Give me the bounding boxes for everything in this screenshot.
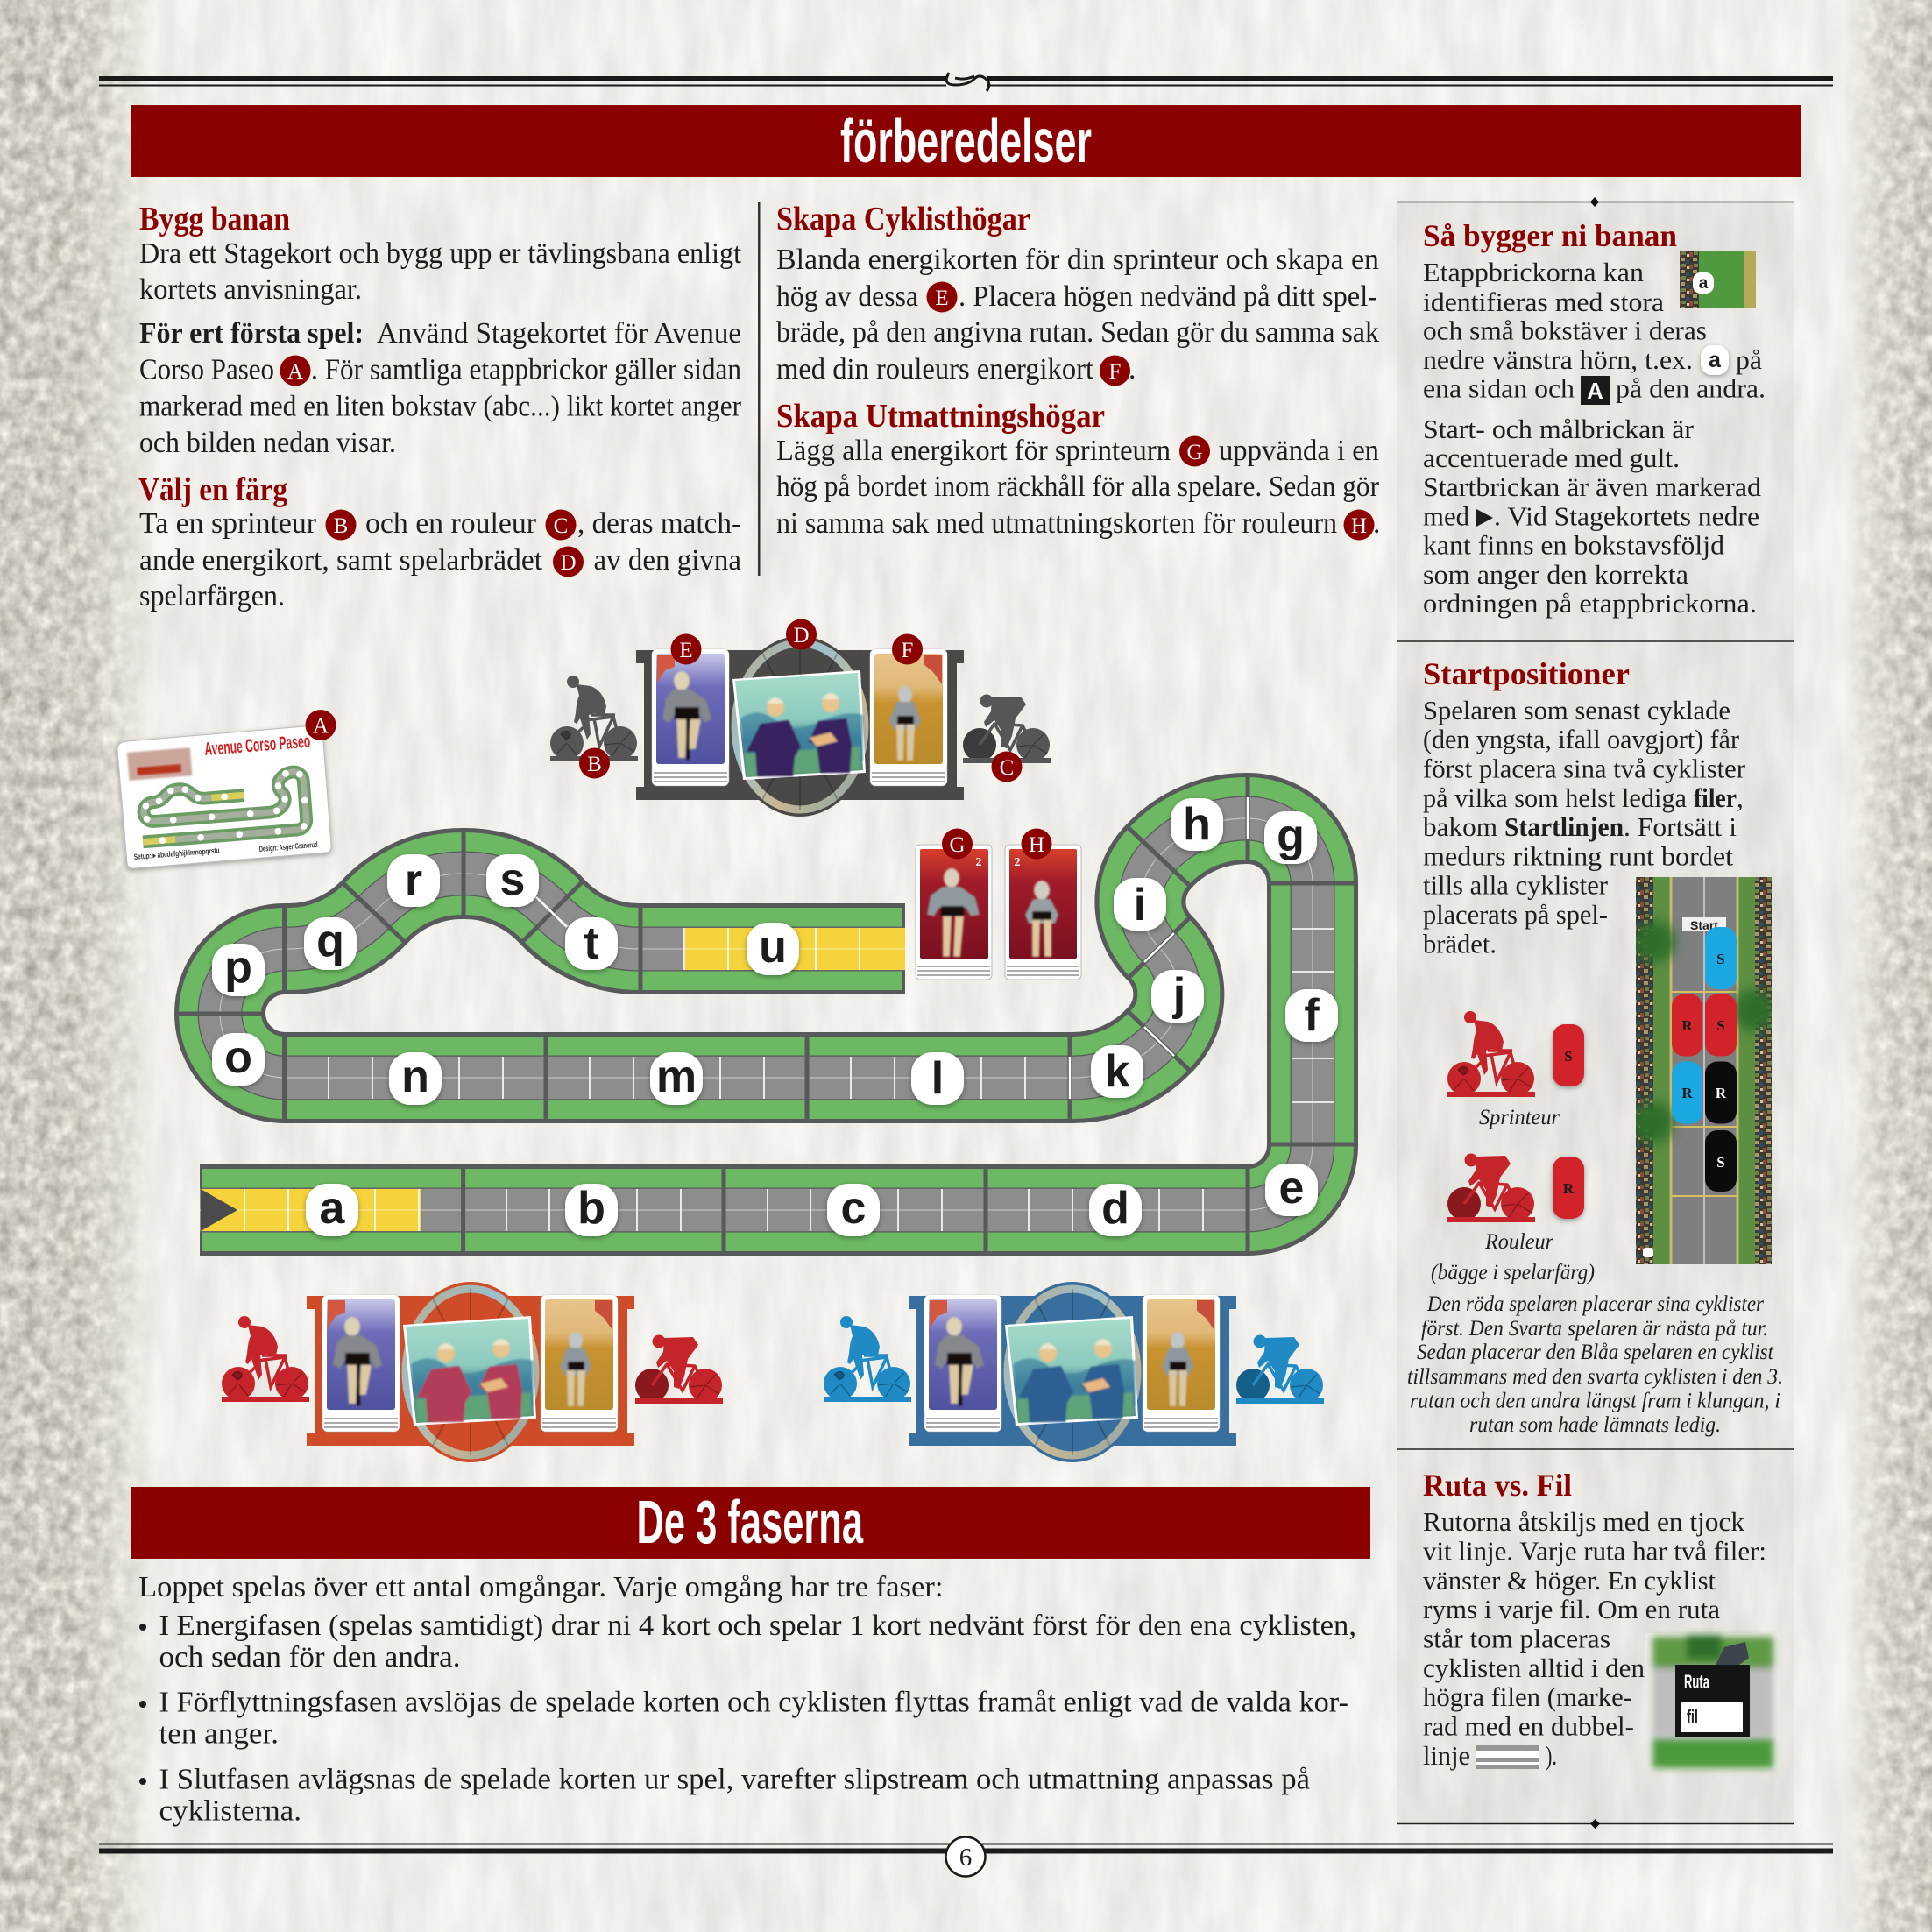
panel: middle column text — [776, 201, 1380, 540]
text block: Skapa Utmattningshögar — [776, 435, 1380, 540]
lane lines — [200, 818, 1334, 1231]
tile r: r — [405, 855, 422, 906]
caption: placement example: Sedan placerar den Blåa spelaren en cyklist — [1417, 1339, 1774, 1364]
badge: H inline — [1344, 510, 1374, 540]
text block: Välj en färg: , deras match- — [577, 507, 741, 540]
tile l: l — [931, 1053, 944, 1104]
text block: Välj en färg: av den givna — [594, 544, 741, 577]
tile d: d — [1101, 1183, 1129, 1234]
text block: Skapa Utmattningshögar: . — [1373, 507, 1380, 540]
badge F — [892, 634, 923, 664]
text block: tile letters — [1423, 257, 1766, 403]
badge: H inline: H — [1351, 514, 1367, 538]
top double rule with ornament — [99, 73, 1833, 91]
text block: tile letters: på — [1736, 344, 1762, 375]
tile i: i — [1134, 880, 1146, 931]
text block: Ruta vs. Fil: ryms i varje fil. Om en ruta — [1423, 1594, 1720, 1624]
text block: Startpositioner: (den yngsta, ifall oavgjort) får — [1423, 724, 1740, 754]
caption: placement example — [1407, 1291, 1783, 1437]
tile u: u — [759, 922, 787, 973]
badge D — [786, 619, 817, 650]
column divider — [758, 202, 761, 576]
text block: Bygg banan: markerad med en liten bokstav (abc...) likt kortet anger — [139, 391, 741, 422]
badge G — [942, 829, 973, 859]
tile g — [1264, 810, 1317, 864]
badge: C inline — [545, 510, 577, 540]
tile a — [306, 1183, 358, 1236]
tile f — [1285, 989, 1338, 1042]
icon: tile corner image: a — [1699, 274, 1709, 293]
text block: Bygg banan: Använd Stagekortet för Avenue — [377, 317, 741, 350]
icon: grey sprinteur B — [550, 676, 638, 761]
text block: Ruta vs. Fil: står tom placeras — [1423, 1623, 1610, 1654]
icon: white letter tile a: a — [1709, 348, 1722, 372]
text block: Skapa Utmattningshögar: Lägg alla energikort för sprinteurn — [776, 435, 1171, 467]
text block: Startpositioner: . Fortsätt i — [1624, 811, 1737, 842]
badge C: C — [1000, 756, 1014, 780]
white road joints — [536, 797, 1248, 1099]
banner: De 3 faserna: De 3 faserna — [636, 1488, 864, 1556]
text block: De 3 faserna: Loppet spelas över ett antal omgångar. Varje omgång har tre faser: — [138, 1571, 943, 1603]
image: ruta and fil example: Ruta — [1684, 1671, 1709, 1693]
badge B: B — [587, 753, 602, 776]
text block: Startpositioner: Spelaren som senast cyklade — [1423, 695, 1730, 725]
text block: tile letters: identifieras med stora — [1423, 287, 1664, 317]
text block: Startpositioner: på vilka som helst lediga — [1423, 782, 1687, 813]
tile q — [304, 916, 357, 970]
icon: tile corner image — [1680, 251, 1756, 308]
card design credit: Design: Asger Granerud — [258, 840, 318, 853]
text block: Ruta vs. Fil — [1423, 1506, 1766, 1771]
tile k: k — [1105, 1046, 1130, 1097]
illustration: exhaustion card stack H — [1005, 829, 1081, 980]
illustration: exhaustion card stack G: 2 — [976, 856, 981, 869]
badge: E inline — [927, 282, 957, 312]
tile borders — [176, 775, 1356, 1255]
tile r — [387, 854, 440, 907]
text block: tile letters: nedre vänstra hörn, t.ex. — [1423, 344, 1693, 375]
tile n: n — [401, 1051, 429, 1102]
label: Sprinteur: Sprinteur — [1479, 1104, 1560, 1129]
text block: start and finish tiles: accentuerade med gult. — [1423, 442, 1680, 473]
text block: Skapa Cyklisthögar: . — [1129, 353, 1136, 386]
card setup line: Setup: ▸ abcdefghijklmnopqrstu — [133, 846, 220, 861]
player board with cards — [636, 636, 964, 817]
tile c: c — [841, 1183, 866, 1234]
badge: A inline — [280, 356, 310, 386]
illustration: exhaustion card stack G — [916, 829, 992, 980]
illustration: blue player set — [824, 1282, 1324, 1462]
text block: start and finish tiles: . Vid Stagekortets nedre — [1494, 501, 1759, 531]
illustration: red player set — [222, 1282, 723, 1462]
token: red S: S — [1564, 1048, 1573, 1065]
badge H: H — [1029, 833, 1044, 857]
tile p — [212, 942, 265, 996]
text block: Skapa Cyklisthögar: hög av dessa — [776, 280, 918, 313]
banner: förberedelser: förberedelser — [840, 107, 1092, 175]
badge E — [671, 634, 701, 664]
icon: grey rouleur C — [963, 694, 1051, 763]
text block: tile letters: och små bokstäver i deras — [1423, 315, 1707, 345]
tile e: e — [1279, 1163, 1304, 1214]
text block: Bygg banan: Dra ett Stagekort och bygg upp er tävlingsbana enligt — [139, 237, 742, 270]
badge: D inline: D — [560, 551, 577, 575]
icon: black letter tile A: A — [1587, 378, 1603, 404]
text block: Startpositioner: medurs riktning runt bordet — [1423, 841, 1733, 871]
badge: E inline: E — [935, 287, 949, 310]
text block: Startpositioner: bakom — [1423, 811, 1497, 842]
badge: F inline: F — [1109, 360, 1121, 384]
red player board — [307, 1282, 634, 1462]
text block: start and finish tiles: med — [1423, 501, 1469, 531]
text block: De 3 faserna: cyklisterna. — [159, 1794, 301, 1828]
badge: G inline — [1179, 436, 1210, 466]
text block: tile letters: Etappbrickorna kan — [1423, 257, 1645, 287]
image: start road with tokens: Start — [1690, 918, 1718, 932]
banner: De 3 faserna — [131, 1487, 1370, 1559]
start triangle — [201, 1189, 237, 1231]
badge: A inline: A — [287, 360, 303, 384]
icon: double line — [1476, 1745, 1539, 1769]
tile j: j — [1172, 969, 1185, 1020]
tile n — [389, 1051, 442, 1105]
tile l — [911, 1052, 964, 1105]
tile b: b — [577, 1183, 605, 1234]
text block: Välj en färg: ande energikort, samt spelarbrädet — [139, 544, 543, 577]
tile q: q — [316, 916, 344, 966]
panel: left column text — [138, 201, 742, 612]
text block: Ruta vs. Fil: vit linje. Varje ruta har två filer: — [1423, 1535, 1766, 1567]
text block: start and finish tiles — [1423, 414, 1762, 619]
heading: Ruta vs. Fil: Ruta vs. Fil — [1423, 1468, 1572, 1503]
heading: Skapa Cyklisthögar: Skapa Cyklisthögar — [776, 201, 1030, 237]
tile p: p — [224, 942, 252, 993]
icon: red sprinteur — [1447, 1011, 1535, 1097]
text block: De 3 faserna: I Förflyttningsfasen avslöjas de spelade korten och cyklisten flyttas framåt enligt vad de valda kor- — [159, 1686, 1348, 1719]
text block: tile letters: ena sidan och — [1423, 373, 1575, 403]
icon: blue sprinteur — [824, 1316, 911, 1402]
page number — [946, 1836, 985, 1877]
tile e — [1265, 1163, 1318, 1216]
text block: De 3 faserna — [138, 1571, 1356, 1828]
tile s — [486, 854, 539, 907]
text block: Skapa Cyklisthögar: . Placera högen nedvänd på ditt spel- — [959, 280, 1377, 313]
text block: Bygg banan: För ert första spel: — [139, 317, 364, 350]
panel: Så bygger ni banan — [1397, 197, 1794, 619]
text block: Välj en färg — [139, 507, 741, 612]
banner: förberedelser — [131, 105, 1801, 177]
text block: Skapa Utmattningshögar: hög på bordet inom räckhåll för alla spelare. Sedan gör — [776, 471, 1379, 503]
text block: Skapa Utmattningshögar: uppvända i en — [1219, 435, 1379, 467]
logo — [127, 747, 192, 781]
card title: Avenue Corso Paseo — [204, 732, 311, 760]
text block: De 3 faserna: och sedan för den andra. — [159, 1641, 461, 1674]
image: start road with tokens: R — [1681, 1017, 1693, 1034]
text block: Skapa Cyklisthögar: Blanda energikorten för din sprinteur och skapa en — [776, 244, 1379, 276]
text block: Ruta vs. Fil: cyklisten alltid i den — [1423, 1652, 1645, 1683]
text block: start and finish tiles: Startbrickan är även markerad — [1423, 471, 1762, 502]
tile j — [1151, 969, 1204, 1023]
badge H — [1022, 829, 1051, 859]
tile m: m — [656, 1051, 697, 1102]
mini track — [138, 768, 311, 846]
image: start road with tokens: S — [1716, 1154, 1725, 1171]
image: start road with tokens: R — [1716, 1085, 1727, 1101]
text block: Ruta vs. Fil: Rutorna åtskiljs med en tjock — [1423, 1506, 1745, 1537]
text block: De 3 faserna: ten anger. — [159, 1717, 279, 1751]
text block: tile letters: på den andra. — [1616, 373, 1766, 403]
text block: Ruta vs. Fil: högra filen (marke- — [1423, 1681, 1632, 1712]
caption: placement example: rutan och den andra längst fram i klungan, i — [1410, 1388, 1780, 1412]
image: ruta and fil example — [1645, 1633, 1780, 1769]
badge F: F — [902, 639, 913, 662]
text block: Välj en färg: och en rouleur — [365, 507, 536, 540]
text block: De 3 faserna: I Energifasen (spelas samtidigt) drar ni 4 kort och spelar 1 kort nedvänt först för den ena cyklisten, — [159, 1610, 1356, 1642]
tile o — [212, 1032, 265, 1086]
heading: Startpositioner: Startpositioner — [1423, 656, 1630, 691]
tile d — [1089, 1183, 1142, 1236]
image: start road with tokens — [1631, 877, 1775, 1264]
text block: start and finish tiles: kant finns en bokstavsföljd — [1423, 529, 1725, 561]
label: Rouleur: Rouleur — [1484, 1228, 1553, 1254]
icon: start triangle — [1476, 509, 1493, 527]
text block: start and finish tiles: som anger den korrekta — [1423, 559, 1688, 590]
image: ruta and fil example: fil — [1687, 1706, 1698, 1728]
text block: Ruta vs. Fil: vänster & höger. En cyklist — [1423, 1565, 1716, 1596]
badge G: G — [949, 833, 966, 857]
text block: Ruta vs. Fil: rad med en dubbel- — [1423, 1710, 1634, 1742]
text block: Startpositioner: brädet. — [1423, 929, 1497, 959]
text block: Bygg banan: . För samtliga etappbrickor gäller sidan — [311, 354, 741, 386]
heading: Bygg banan: Bygg banan — [139, 201, 290, 237]
tile f: f — [1304, 990, 1320, 1041]
text block: start and finish tiles: Start- och målbrickan är — [1423, 414, 1695, 444]
track band — [200, 818, 1313, 1210]
badge A — [305, 710, 336, 740]
tile s: s — [500, 854, 525, 905]
badge: G inline: G — [1186, 441, 1203, 464]
badge E: E — [679, 639, 693, 662]
icon: red sprinteur — [222, 1316, 309, 1402]
image: start road with tokens: R — [1681, 1085, 1693, 1101]
icon: red rouleur — [1447, 1153, 1535, 1222]
text block: start and finish tiles: ordningen på etappbrickorna. — [1423, 588, 1757, 619]
badge C — [992, 752, 1022, 782]
tile g: g — [1277, 810, 1305, 861]
text block: Startpositioner — [1423, 695, 1746, 959]
image: start road with tokens: S — [1716, 951, 1725, 967]
heading: Välj en färg: Välj en färg — [138, 471, 287, 508]
badge A: A — [313, 715, 329, 738]
illustration: stage card A — [117, 710, 336, 868]
tile c — [827, 1183, 880, 1236]
text block: Välj en färg: spelarfärgen. — [139, 580, 285, 612]
caption: placement example: först. Den Svarta spelaren är nästa på tur. — [1421, 1315, 1768, 1341]
badge: B inline — [326, 510, 356, 540]
badge: F inline — [1100, 356, 1130, 386]
road surface — [200, 818, 1313, 1210]
icon: blue rouleur — [1236, 1335, 1324, 1404]
text block: Startpositioner: placerats på spel- — [1423, 899, 1608, 930]
blue player board — [909, 1282, 1236, 1462]
text block: Startpositioner: först placera sina två cyklister — [1423, 754, 1746, 783]
badge: C inline: C — [554, 514, 568, 538]
page number: 6 — [959, 1844, 972, 1872]
text block: Ruta vs. Fil: ). — [1546, 1740, 1557, 1771]
text block: Startpositioner: , — [1737, 782, 1744, 813]
bottom panel rule with diamond — [1397, 1819, 1794, 1829]
badge D: D — [793, 624, 810, 648]
text block: Välj en färg: Ta en sprinteur — [139, 507, 316, 540]
tile k — [1091, 1045, 1143, 1098]
caption: placement example: tillsammans med den svarta cyklisten i den 3. — [1407, 1363, 1783, 1389]
badge B — [579, 748, 610, 778]
token: red R: R — [1563, 1180, 1575, 1197]
text block: Bygg banan: Corso Paseo — [139, 354, 274, 386]
panel: Ruta vs. Fil — [1423, 1468, 1780, 1771]
text block: Bygg banan — [139, 237, 742, 459]
panel: Startpositioner — [1407, 656, 1783, 1437]
icon: black letter tile A — [1581, 376, 1610, 405]
tile o: o — [224, 1032, 252, 1083]
text block: Bygg banan: och bilden nedan visar. — [139, 427, 396, 459]
tile h: h — [1183, 799, 1211, 850]
tile t — [565, 917, 618, 970]
illustration: exhaustion card stack H: 2 — [1015, 856, 1020, 869]
heading: Skapa Utmattningshögar: Skapa Utmattningshögar — [776, 398, 1105, 435]
text block: De 3 faserna: I Slutfasen avlägsnas de spelade korten ur spel, varefter slipstream och utmattning anpassas på — [159, 1763, 1310, 1796]
heading: Så bygger ni banan: Så bygger ni banan — [1423, 218, 1677, 253]
tile b — [565, 1183, 618, 1236]
tile a: a — [320, 1183, 346, 1234]
illustration: grey player set — [550, 619, 1051, 817]
text block: Skapa Cyklisthögar — [776, 244, 1379, 386]
text block: Startpositioner: filer — [1694, 782, 1737, 813]
tile t: t — [584, 918, 599, 969]
bottom double rule — [99, 1844, 1833, 1854]
icon: white letter tile a — [1701, 345, 1729, 375]
tile u — [747, 922, 799, 975]
text block: Skapa Cyklisthögar: bräde, på den angivna rutan. Sedan gör du samma sak — [776, 316, 1379, 349]
badge: D inline — [553, 547, 584, 577]
illustration: race track — [176, 775, 1356, 1255]
badge: B inline: B — [334, 514, 348, 538]
text block: Bygg banan: kortets anvisningar. — [139, 273, 362, 306]
text block: Ruta vs. Fil: linje — [1423, 1740, 1470, 1771]
tile labels — [212, 798, 1338, 1236]
token: red S — [1553, 1024, 1584, 1086]
icon: red rouleur — [635, 1335, 723, 1404]
text block: Skapa Utmattningshögar: ni samma sak med utmattningskorten för rouleurn — [776, 507, 1337, 540]
caption: placement example: rutan som hade lämnats ledig. — [1469, 1412, 1721, 1437]
label: bägge i spelarfärg: (bägge i spelarfärg) — [1431, 1259, 1595, 1284]
image: start road with tokens: S — [1716, 1017, 1725, 1034]
tile i — [1114, 878, 1166, 931]
text block: Startpositioner: Startlinjen — [1504, 811, 1624, 842]
text block: Skapa Cyklisthögar: med din rouleurs energikort — [776, 353, 1094, 386]
yellow start and finish zones — [201, 928, 905, 1231]
tile h — [1171, 798, 1223, 851]
token: red R — [1553, 1157, 1584, 1219]
caption: placement example: Den röda spelaren placerar sina cyklister — [1426, 1291, 1764, 1316]
text block: Startpositioner: tills alla cyklister — [1423, 869, 1609, 901]
